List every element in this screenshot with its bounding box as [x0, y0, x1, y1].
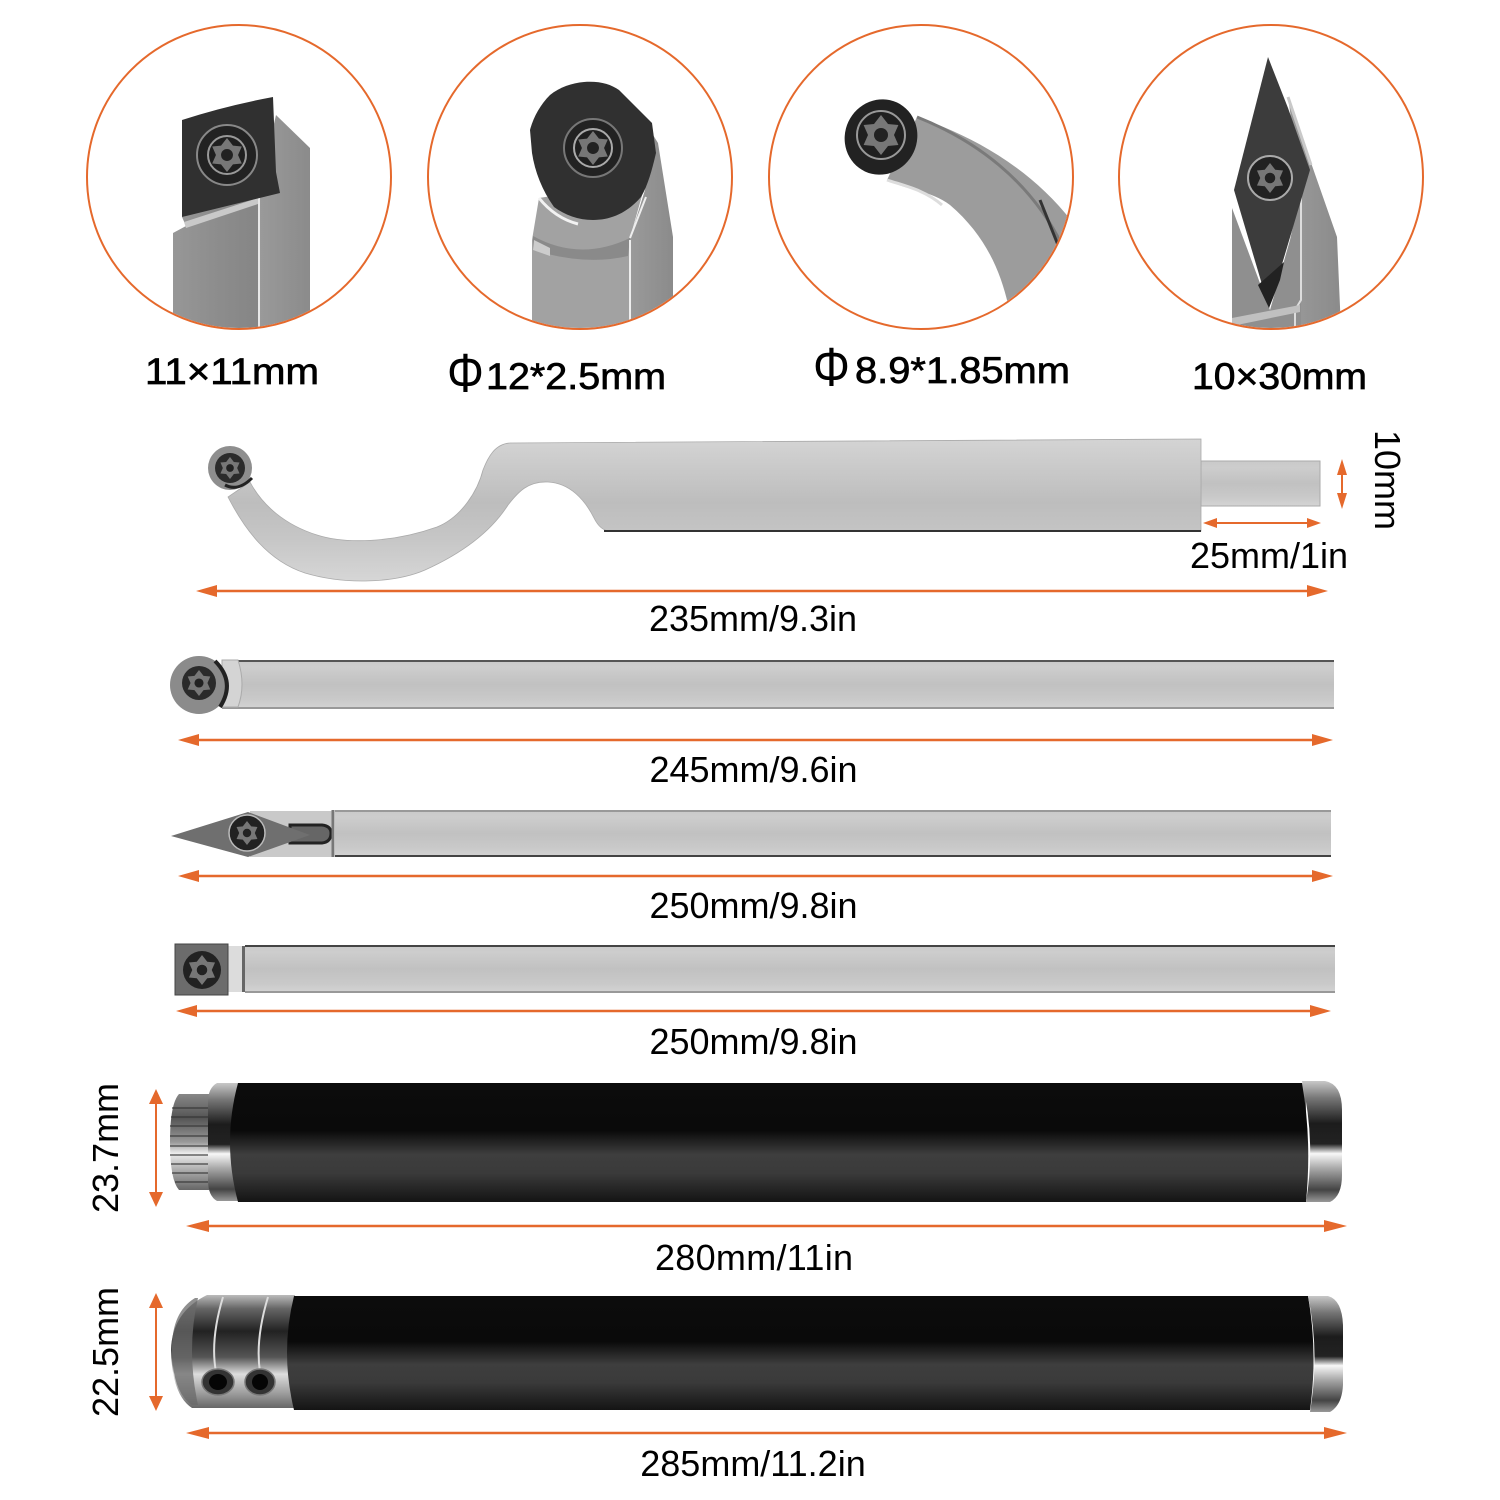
panel: diamond insert close-up [1119, 25, 1423, 330]
label: diameter 12*2.5mm [447, 342, 666, 404]
handle: collet end with set screws [171, 1295, 1343, 1412]
dimension: 250mm lower [176, 1005, 1331, 1062]
dimension: 235mm [196, 585, 1328, 639]
dimension: 22.5mm handle diameter [85, 1287, 163, 1417]
panel: small round insert on curved arm close-up [769, 25, 1085, 329]
dimension: 23.7mm handle diameter [85, 1083, 163, 1213]
panel: round insert close-up [428, 25, 732, 330]
label: diameter 12*2.5mm: Φ [447, 342, 484, 404]
dimension: 22.5mm handle diameter: 22.5mm [85, 1287, 126, 1417]
handle: threaded end [170, 1081, 1342, 1202]
dimension: 285mm [186, 1427, 1347, 1484]
dimension: 280mm: 280mm/11in [655, 1237, 853, 1278]
dimension: 10mm tang height: 10mm [1367, 430, 1408, 530]
tool: diamond-insert straight bar [171, 810, 1331, 857]
label: diameter 12*2.5mm: 12*2.5mm [486, 356, 666, 397]
dimension: 10mm tang height [1337, 430, 1408, 530]
dimension: 23.7mm handle diameter: 23.7mm [85, 1083, 126, 1213]
label: 11x11mm: 11×11mm [145, 351, 319, 392]
label: diameter 8.9*1.85mm [813, 336, 1070, 398]
dimension: 250mm upper: 250mm/9.8in [649, 885, 858, 926]
dimension: 250mm lower: 250mm/9.8in [649, 1021, 858, 1062]
label: diameter 8.9*1.85mm: 8.9*1.85mm [855, 350, 1070, 391]
dimension: 250mm upper [178, 870, 1333, 926]
dimension: 285mm: 285mm/11.2in [640, 1443, 866, 1484]
label: 10x30mm: 10×30mm [1192, 356, 1367, 397]
panel: square insert close-up [87, 25, 391, 330]
dimension: 25mm/1in tang length: 25mm/1in [1190, 535, 1348, 576]
tool: hook cutter [208, 439, 1320, 581]
tool: square-insert straight bar [175, 944, 1335, 995]
dimension: 245mm [178, 734, 1333, 790]
tool: round-insert straight bar [170, 656, 1334, 714]
dimension: 235mm: 235mm/9.3in [649, 598, 857, 639]
label: diameter 8.9*1.85mm: Φ [813, 336, 850, 398]
dimension: 245mm: 245mm/9.6in [649, 749, 858, 790]
dimension: 280mm [186, 1220, 1347, 1278]
